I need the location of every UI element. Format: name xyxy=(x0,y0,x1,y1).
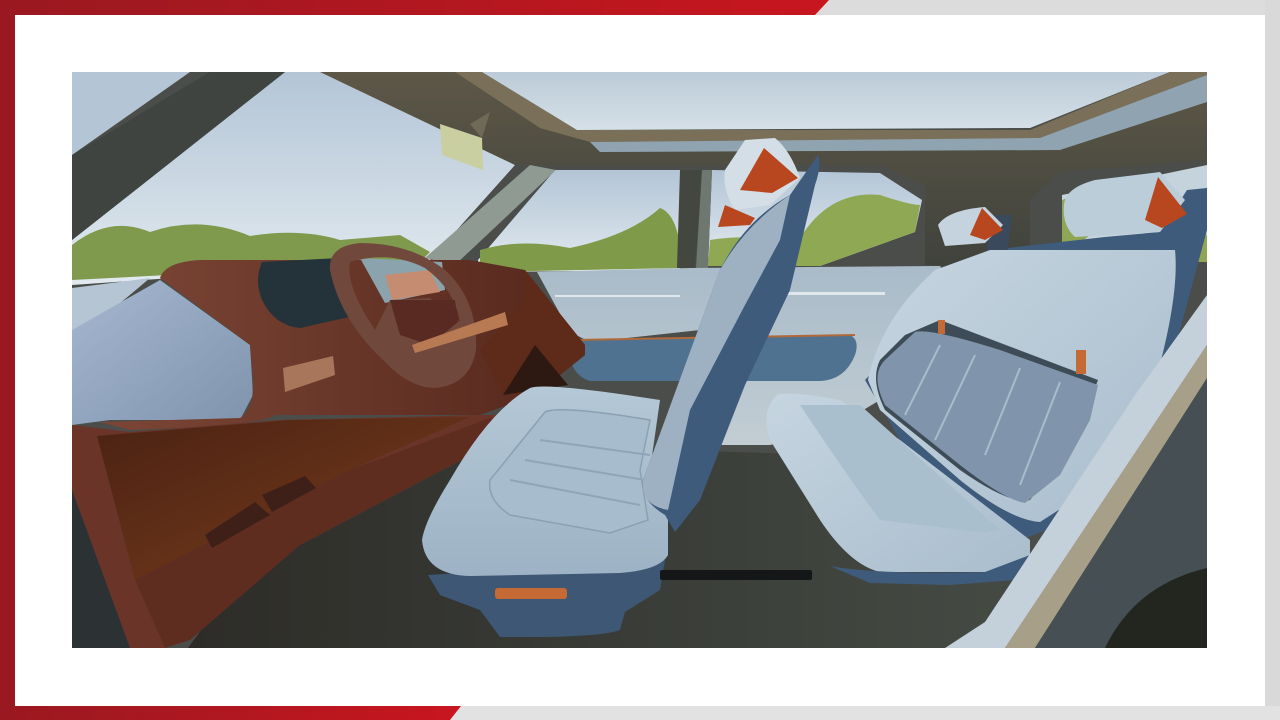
door panel behind front seat xyxy=(537,266,960,445)
wood trim xyxy=(283,312,508,392)
rear seat back xyxy=(865,172,1207,540)
dashboard body xyxy=(100,260,585,430)
rear seat cushion xyxy=(766,394,1030,585)
lower door well xyxy=(72,415,540,648)
dashboard left panel xyxy=(72,278,150,330)
front seat base xyxy=(422,386,668,637)
roof and pillars xyxy=(72,72,1207,270)
screen xyxy=(258,258,445,328)
sliding door sill and trim xyxy=(945,295,1207,648)
rear-view mirror xyxy=(440,112,490,170)
photo: car interior xyxy=(72,72,1207,648)
windows with sky and trees xyxy=(72,72,1207,285)
floor slot xyxy=(660,570,812,580)
window switches xyxy=(205,476,316,548)
front seat back xyxy=(643,138,819,532)
floor xyxy=(188,450,938,648)
steering wheel xyxy=(330,243,476,388)
